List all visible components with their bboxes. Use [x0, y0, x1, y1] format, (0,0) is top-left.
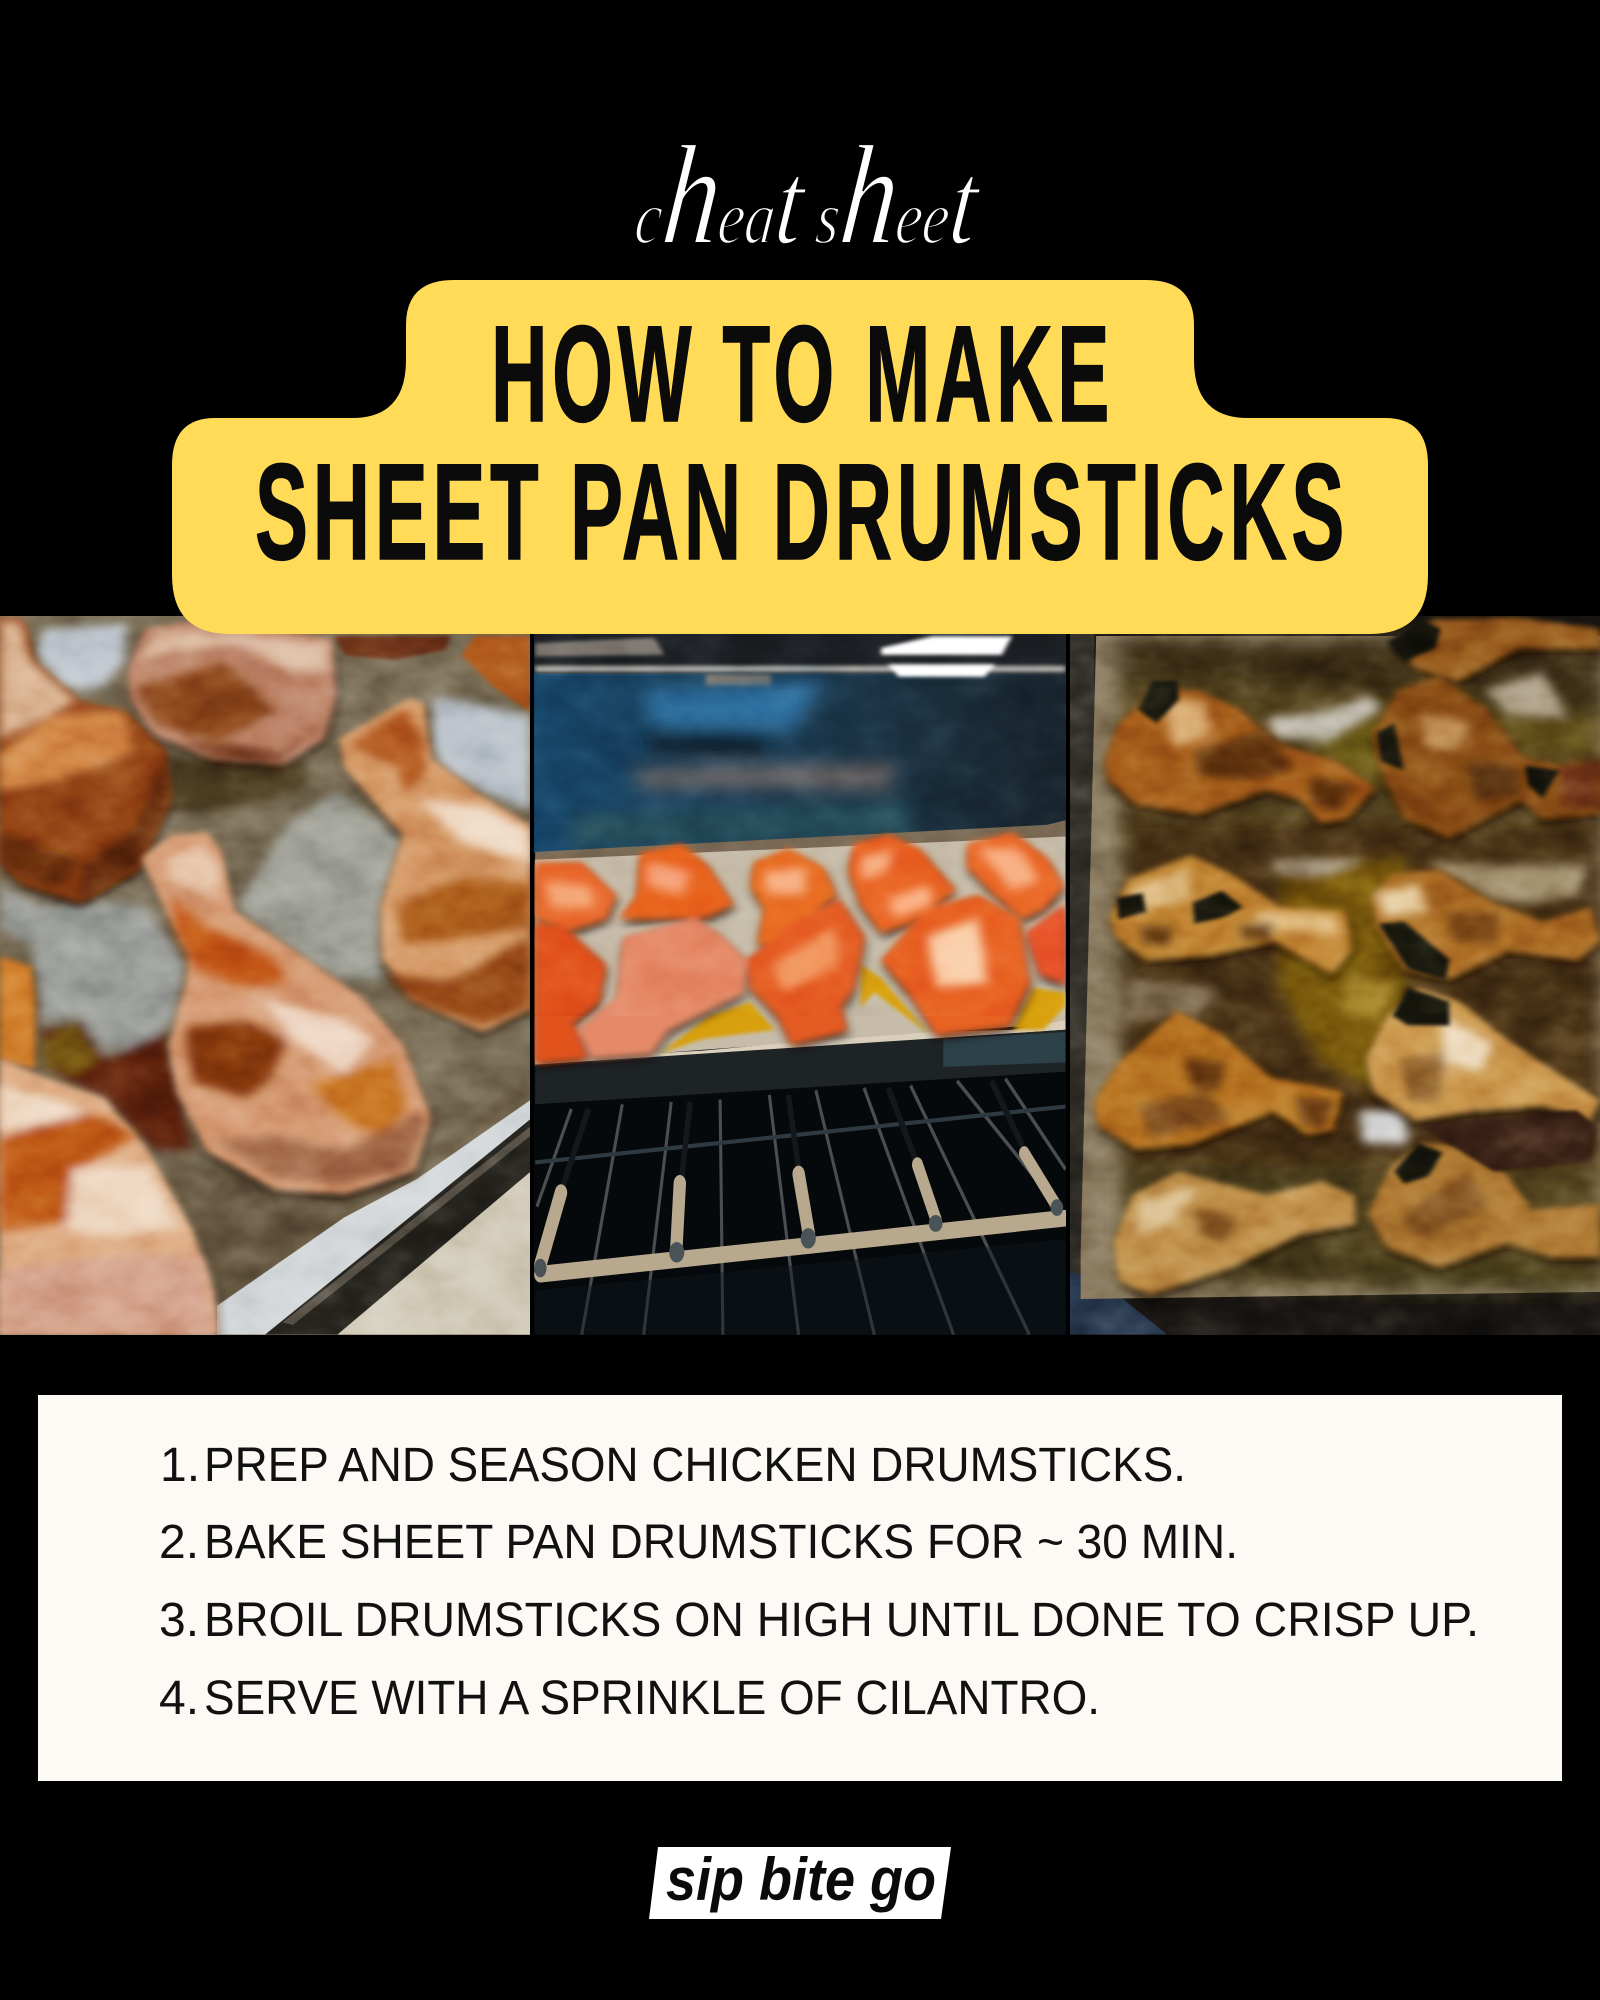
panel: steps list [38, 1395, 1562, 1781]
drumstick B [127, 619, 336, 763]
photo: broiled crispy drumsticks on a sheet pan [1060, 610, 1600, 1346]
drumstick G [0, 956, 217, 1334]
step 4: SERVE WITH A SPRINKLE OF CILANTRO. [204, 1672, 1100, 1725]
charred spots [1117, 617, 1597, 1183]
step 1: 1. [160, 1439, 200, 1492]
drumstick E [339, 698, 530, 1031]
step 4: 4. [159, 1672, 199, 1725]
texture overlay [0, 616, 530, 1335]
title banner [172, 280, 1428, 634]
title line 1: HOW TO MAKE [491, 298, 1114, 451]
step 3: BROIL DRUMSTICKS ON HIGH UNTIL DONE TO CRISP UP. [204, 1594, 1479, 1647]
script subtitle: cheat sheet: cheat sheet [630, 116, 989, 274]
photo: drumsticks in the oven on a sheet pan [530, 615, 1071, 1337]
pan and parchment [535, 820, 1066, 862]
oven racks [535, 1079, 1066, 1335]
step 1: PREP AND SEASON CHICKEN DRUMSTICKS. [204, 1439, 1186, 1492]
drumstick A [0, 616, 169, 901]
photo: seasoned raw drumsticks on parchment [0, 600, 537, 1346]
crisp drumsticks [1094, 617, 1600, 1294]
step 2: 2. [159, 1516, 199, 1569]
texture overlay [534, 616, 1066, 1016]
drumsticks C and D [334, 636, 530, 712]
drumstick F [141, 832, 431, 1193]
step 2: BAKE SHEET PAN DRUMSTICKS FOR ~ 30 MIN. [204, 1516, 1238, 1569]
texture overlay [1070, 616, 1600, 1335]
logo: sip bite go: sip bite go [666, 1846, 936, 1913]
step 3: 3. [159, 1594, 199, 1647]
oil pools [661, 965, 1066, 1053]
oven chickens [535, 832, 1066, 1062]
